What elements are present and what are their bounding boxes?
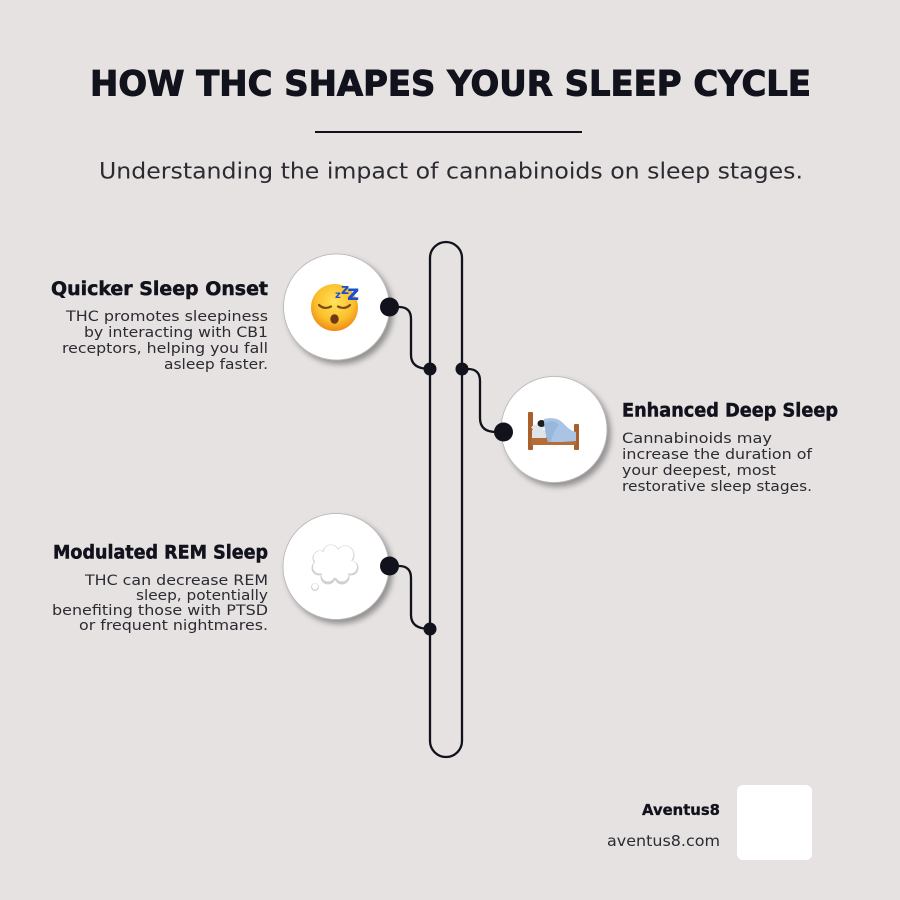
connector: deep sleep to timeline — [462, 369, 496, 432]
heading: quicker sleep onset: Quicker Sleep Onset — [51, 279, 268, 300]
node: rem sleep badge dot — [380, 556, 399, 576]
panel: quicker sleep onset — [51, 254, 436, 376]
connector: sleep onset to timeline — [390, 307, 430, 369]
text block: enhanced deep sleep description: increase the duration of — [622, 447, 813, 463]
heading: modulated rem sleep: Modulated REM Sleep — [53, 542, 268, 564]
text block: quicker sleep onset description: asleep faster. — [164, 357, 268, 373]
node: deep sleep timeline dot — [456, 362, 468, 376]
timeline capsule — [430, 242, 462, 757]
icon: sleeping face badge: z — [341, 282, 349, 298]
text block: quicker sleep onset description: receptors, helping you fall — [62, 341, 268, 357]
text block: quicker sleep onset description: THC promotes sleepiness — [65, 309, 268, 325]
text block: modulated rem sleep description: benefiting those with PTSD — [52, 603, 268, 619]
subtitle: Understanding the impact of cannabinoids on sleep stages. — [99, 158, 803, 184]
text block: quicker sleep onset description — [62, 309, 268, 373]
connector: rem sleep to timeline — [390, 566, 430, 629]
footer brand — [607, 785, 812, 860]
text block: enhanced deep sleep description: Cannabinoids may — [622, 431, 772, 447]
text block: enhanced deep sleep description: restorative sleep stages. — [622, 479, 812, 495]
icon: sleeping face badge: z — [347, 281, 359, 305]
icon: sleeping face badge — [284, 254, 390, 360]
heading: enhanced deep sleep: Enhanced Deep Sleep — [622, 400, 838, 422]
text block: modulated rem sleep description: or frequent nightmares. — [79, 618, 268, 634]
panel: enhanced deep sleep — [456, 362, 838, 495]
title: HOW THC SHAPES YOUR SLEEP CYCLE — [90, 64, 811, 104]
text block: modulated rem sleep description: sleep, potentially — [136, 588, 268, 604]
node: sleep onset badge dot — [380, 298, 399, 316]
text block: modulated rem sleep description — [52, 573, 268, 634]
node: sleep onset timeline dot — [424, 362, 436, 376]
text block: enhanced deep sleep description: your deepest, most — [622, 463, 777, 479]
text block: modulated rem sleep description: THC can decrease REM — [84, 573, 268, 589]
text block: quicker sleep onset description: by interacting with CB1 — [84, 325, 268, 341]
node: deep sleep badge dot — [494, 422, 513, 442]
node: rem sleep timeline dot — [424, 622, 436, 636]
panel: modulated rem sleep — [52, 514, 436, 636]
icon: thought balloon badge — [283, 514, 389, 620]
logo placeholder — [737, 785, 812, 860]
brand url: aventus8.com — [607, 832, 720, 850]
text block: enhanced deep sleep description — [622, 431, 813, 495]
icon: bed badge — [501, 376, 607, 482]
icon: sleeping face badge: z — [335, 290, 341, 301]
brand name: Aventus8 — [642, 801, 720, 819]
